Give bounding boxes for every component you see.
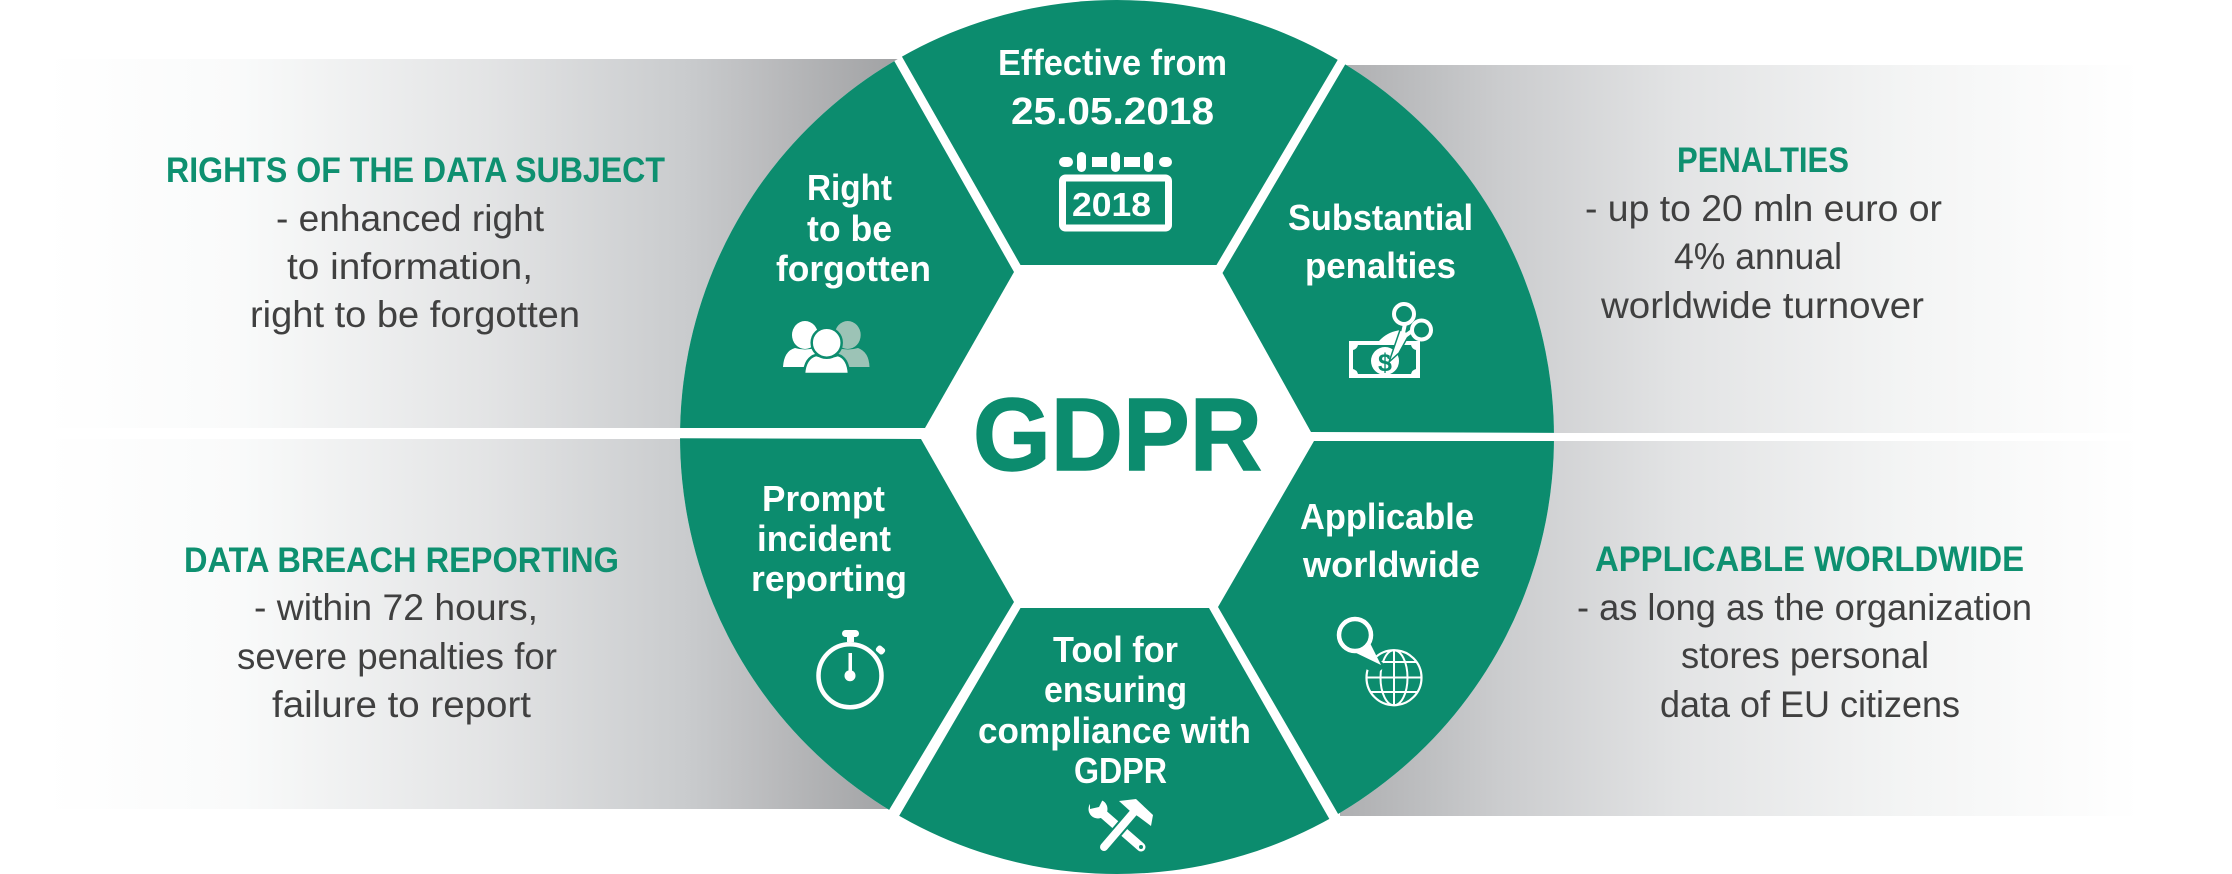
panel: data breach reporting xyxy=(0,439,900,809)
text block: applicable description: stores personal xyxy=(1681,635,1929,676)
text block: rights description: to information, xyxy=(287,246,533,287)
segment: substantial penalties: Substantial xyxy=(1288,197,1473,238)
text block: breach description xyxy=(237,587,557,725)
text block: penalties description: - up to 20 mln euro or xyxy=(1585,188,1942,229)
segment: effective from: 25.05.2018 xyxy=(1011,91,1214,133)
panel: applicable worldwide xyxy=(1340,441,2232,816)
segment: tool for ensuring compliance: Tool for xyxy=(1053,629,1178,670)
text block: applicable description: data of EU citizens xyxy=(1660,684,1960,725)
segment: effective from: Effective from xyxy=(998,42,1227,83)
text block: applicable description xyxy=(1577,587,2032,725)
text block: penalties description: 4% annual xyxy=(1674,236,1842,277)
text block: penalties description: worldwide turnover xyxy=(1600,285,1924,326)
segment: tool for ensuring compliance xyxy=(899,608,1330,874)
segment: tool for ensuring compliance: compliance with xyxy=(978,710,1251,751)
segment: applicable worldwide: Applicable xyxy=(1300,496,1474,537)
text block: breach description: severe penalties for xyxy=(237,636,557,677)
icon: scissors cutting a banknote xyxy=(1349,304,1431,378)
segment: applicable worldwide xyxy=(1218,441,1554,814)
heading: data breach reporting: DATA BREACH REPORTING xyxy=(184,541,619,580)
text block: rights description xyxy=(250,198,580,335)
segment: applicable worldwide: worldwide xyxy=(1302,544,1480,585)
segment: right to be forgotten: Right xyxy=(807,167,892,208)
segment: effective from xyxy=(902,0,1338,265)
segment: prompt incident reporting: Prompt xyxy=(762,478,885,519)
segment: prompt incident reporting: incident xyxy=(757,518,891,559)
text block: rights description: right to be forgotten xyxy=(250,294,580,335)
icon: calendar: 2018 xyxy=(1072,186,1151,223)
segment: substantial penalties xyxy=(1222,64,1554,433)
icon: wrench and hammer xyxy=(1088,797,1153,849)
text block: penalties description xyxy=(1585,188,1942,326)
icon: stopwatch xyxy=(818,630,886,707)
segment: tool for ensuring compliance: ensuring xyxy=(1044,669,1187,710)
icon: people xyxy=(783,321,870,374)
text block: applicable description: - as long as the organization xyxy=(1577,587,2032,628)
text block: breach description: - within 72 hours, xyxy=(254,587,538,628)
heading: applicable worldwide: APPLICABLE WORLDWIDE xyxy=(1595,540,2024,579)
segment: tool for ensuring compliance: GDPR xyxy=(1074,750,1167,791)
heading: penalties: PENALTIES xyxy=(1677,141,1849,180)
segment: prompt incident reporting xyxy=(680,438,1014,810)
segment: substantial penalties: penalties xyxy=(1305,245,1456,286)
icon: scissors cutting a banknote: $ xyxy=(1378,349,1392,377)
panel: rights of the data subject xyxy=(0,59,900,428)
central wheel xyxy=(680,0,1554,874)
segment: right to be forgotten: forgotten xyxy=(776,248,931,289)
text block: breach description: failure to report xyxy=(272,684,532,725)
panel: penalties xyxy=(1340,65,2232,433)
title: GDPR: GDPR xyxy=(973,377,1262,492)
icon: globe with magnifier pin xyxy=(1339,619,1422,705)
icon: calendar xyxy=(1059,152,1172,228)
segment: right to be forgotten xyxy=(680,61,1014,428)
text block: rights description: - enhanced right xyxy=(276,198,545,239)
segment: right to be forgotten: to be xyxy=(807,208,892,249)
heading: rights of the data subject: RIGHTS OF THE DATA SUBJECT xyxy=(166,151,665,190)
segment: prompt incident reporting: reporting xyxy=(751,558,907,599)
